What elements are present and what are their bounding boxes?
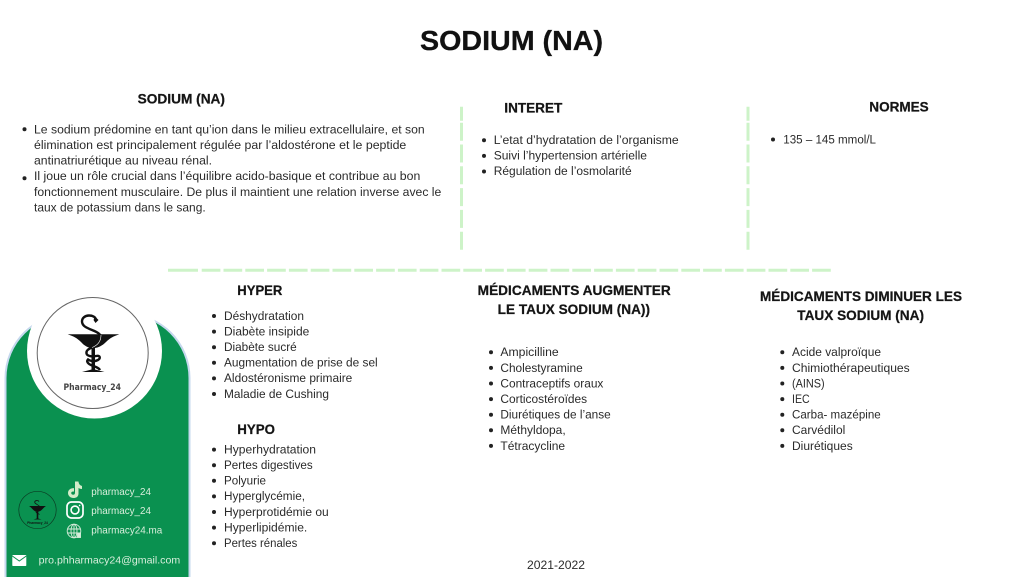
- heading: medicaments diminuer: MÉDICAMENTS DIMINUER LES: [760, 289, 962, 304]
- heading: hyper: HYPER: [237, 283, 283, 298]
- list: hypo causes: Hyperprotidémie ou: [224, 505, 329, 519]
- list: medicaments augmenter: Tétracycline: [500, 439, 565, 453]
- list: hyper causes: Augmentation de prise de sel: [224, 356, 378, 370]
- list: medicaments augmenter: [489, 345, 611, 453]
- heading: medicaments augmenter: [478, 283, 671, 317]
- list: hypo causes: Hyperhydratation: [224, 442, 316, 456]
- panel: hypo: [212, 422, 329, 550]
- list: hyper causes: [212, 309, 378, 401]
- social handle: tiktok: pharmacy_24: [91, 486, 151, 498]
- small logo: Pharmacy_24: [27, 521, 48, 525]
- icon: globe: [67, 524, 81, 538]
- panel: interet: [482, 101, 679, 178]
- list: hyper causes: Diabète insipide: [224, 324, 309, 338]
- list: normes: 135 – 145 mmol/L: [783, 132, 876, 146]
- text block: sodium description list: fonctionnement musculaire. De plus il maintient une relation inverse avec le: [34, 185, 441, 199]
- list: medicaments diminuer: Acide valproïque: [792, 345, 881, 359]
- title: SODIUM (NA): [420, 25, 603, 56]
- list: hypo causes: Pertes digestives: [224, 458, 313, 472]
- list: medicaments diminuer: Diurétiques: [792, 439, 853, 453]
- list: hyper causes: Déshydratation: [224, 309, 304, 323]
- list: medicaments augmenter: Cholestyramine: [500, 361, 583, 375]
- heading: medicaments augmenter: MÉDICAMENTS AUGMENTER: [478, 283, 671, 298]
- list: interet: Régulation de l’osmolarité: [494, 164, 632, 178]
- list: hypo causes: Polyurie: [224, 474, 266, 488]
- panel: hyper: [212, 283, 378, 401]
- list: medicaments augmenter: Corticostéroïdes: [500, 392, 587, 406]
- list: medicaments diminuer: Carba- mazépine: [792, 408, 881, 422]
- list: medicaments augmenter: Contraceptifs oraux: [500, 376, 604, 390]
- small logo: [19, 491, 56, 529]
- panel: sodium description: [22, 91, 441, 215]
- heading: hypo: HYPO: [237, 422, 275, 437]
- list: medicaments diminuer: (AINS): [792, 376, 825, 390]
- text block: sodium description list: [22, 122, 441, 215]
- panel: green sidebar: [4, 280, 190, 577]
- panel: medicaments augmenter: [478, 283, 671, 453]
- social handle: instagram: pharmacy_24: [91, 505, 151, 517]
- heading: sodium: SODIUM (NA): [138, 91, 225, 106]
- text block: sodium description list: Le sodium prédomine en tant qu’ion dans le milieu extracellulaire, et son: [34, 122, 425, 136]
- heading: interet: INTERET: [504, 101, 563, 116]
- heading: medicaments augmenter: LE TAUX SODIUM (NA)): [498, 302, 650, 317]
- list: medicaments augmenter: Diurétiques de l’anse: [500, 408, 611, 422]
- heading: medicaments diminuer: [760, 289, 962, 323]
- icon: instagram: [67, 502, 83, 518]
- list: hypo causes: Hyperlipidémie.: [224, 520, 307, 534]
- text block: sodium description list: élimination est principalement régulée par l’aldostérone et le peptide: [34, 138, 406, 152]
- list: hyper causes: Diabète sucré: [224, 340, 297, 354]
- list: medicaments diminuer: Chimiothérapeutiques: [792, 361, 910, 375]
- list: hypo causes: Pertes rénales: [224, 536, 297, 550]
- list: interet: [482, 133, 679, 178]
- list: hyper causes: Aldostéronisme primaire: [224, 371, 352, 385]
- heading: normes: NORMES: [869, 99, 929, 114]
- logo name: Pharmacy_24: [64, 383, 121, 393]
- icon: mail: [12, 555, 26, 566]
- list: hyper causes: Maladie de Cushing: [224, 387, 329, 401]
- list: medicaments augmenter: Méthyldopa,: [500, 423, 566, 437]
- text block: sodium description list: taux de potassium dans le sang.: [34, 201, 206, 215]
- list: medicaments diminuer: IEC: [792, 392, 810, 406]
- icon: tiktok: [68, 482, 82, 498]
- list: interet: Suivi l’hypertension artérielle: [494, 149, 647, 163]
- list: medicaments diminuer: Carvédilol: [792, 423, 845, 437]
- list: medicaments augmenter: Ampicilline: [500, 345, 559, 359]
- logo badge: [37, 298, 148, 408]
- panel: normes: [771, 99, 929, 146]
- panel: medicaments diminuer: [760, 289, 962, 453]
- icon: bowl of hygieia: [68, 316, 119, 372]
- text block: sodium description list: antinatriurétique au niveau rénal.: [34, 154, 212, 168]
- heading: medicaments diminuer: TAUX SODIUM (NA): [797, 308, 924, 323]
- list: hypo causes: Hyperglycémie,: [224, 489, 305, 503]
- email address: pro.phharmacy24@gmail.com: [39, 554, 180, 566]
- year label: 2021-2022: [527, 558, 585, 572]
- website: pharmacy24.ma: [91, 524, 162, 536]
- text block: sodium description list: Il joue un rôle crucial dans l’équilibre acido-basique et contribue au bon: [34, 169, 420, 183]
- list: hypo causes: [212, 442, 329, 550]
- list: medicaments diminuer: [780, 345, 910, 453]
- list: interet: L’etat d’hydratation de l’organisme: [494, 133, 679, 147]
